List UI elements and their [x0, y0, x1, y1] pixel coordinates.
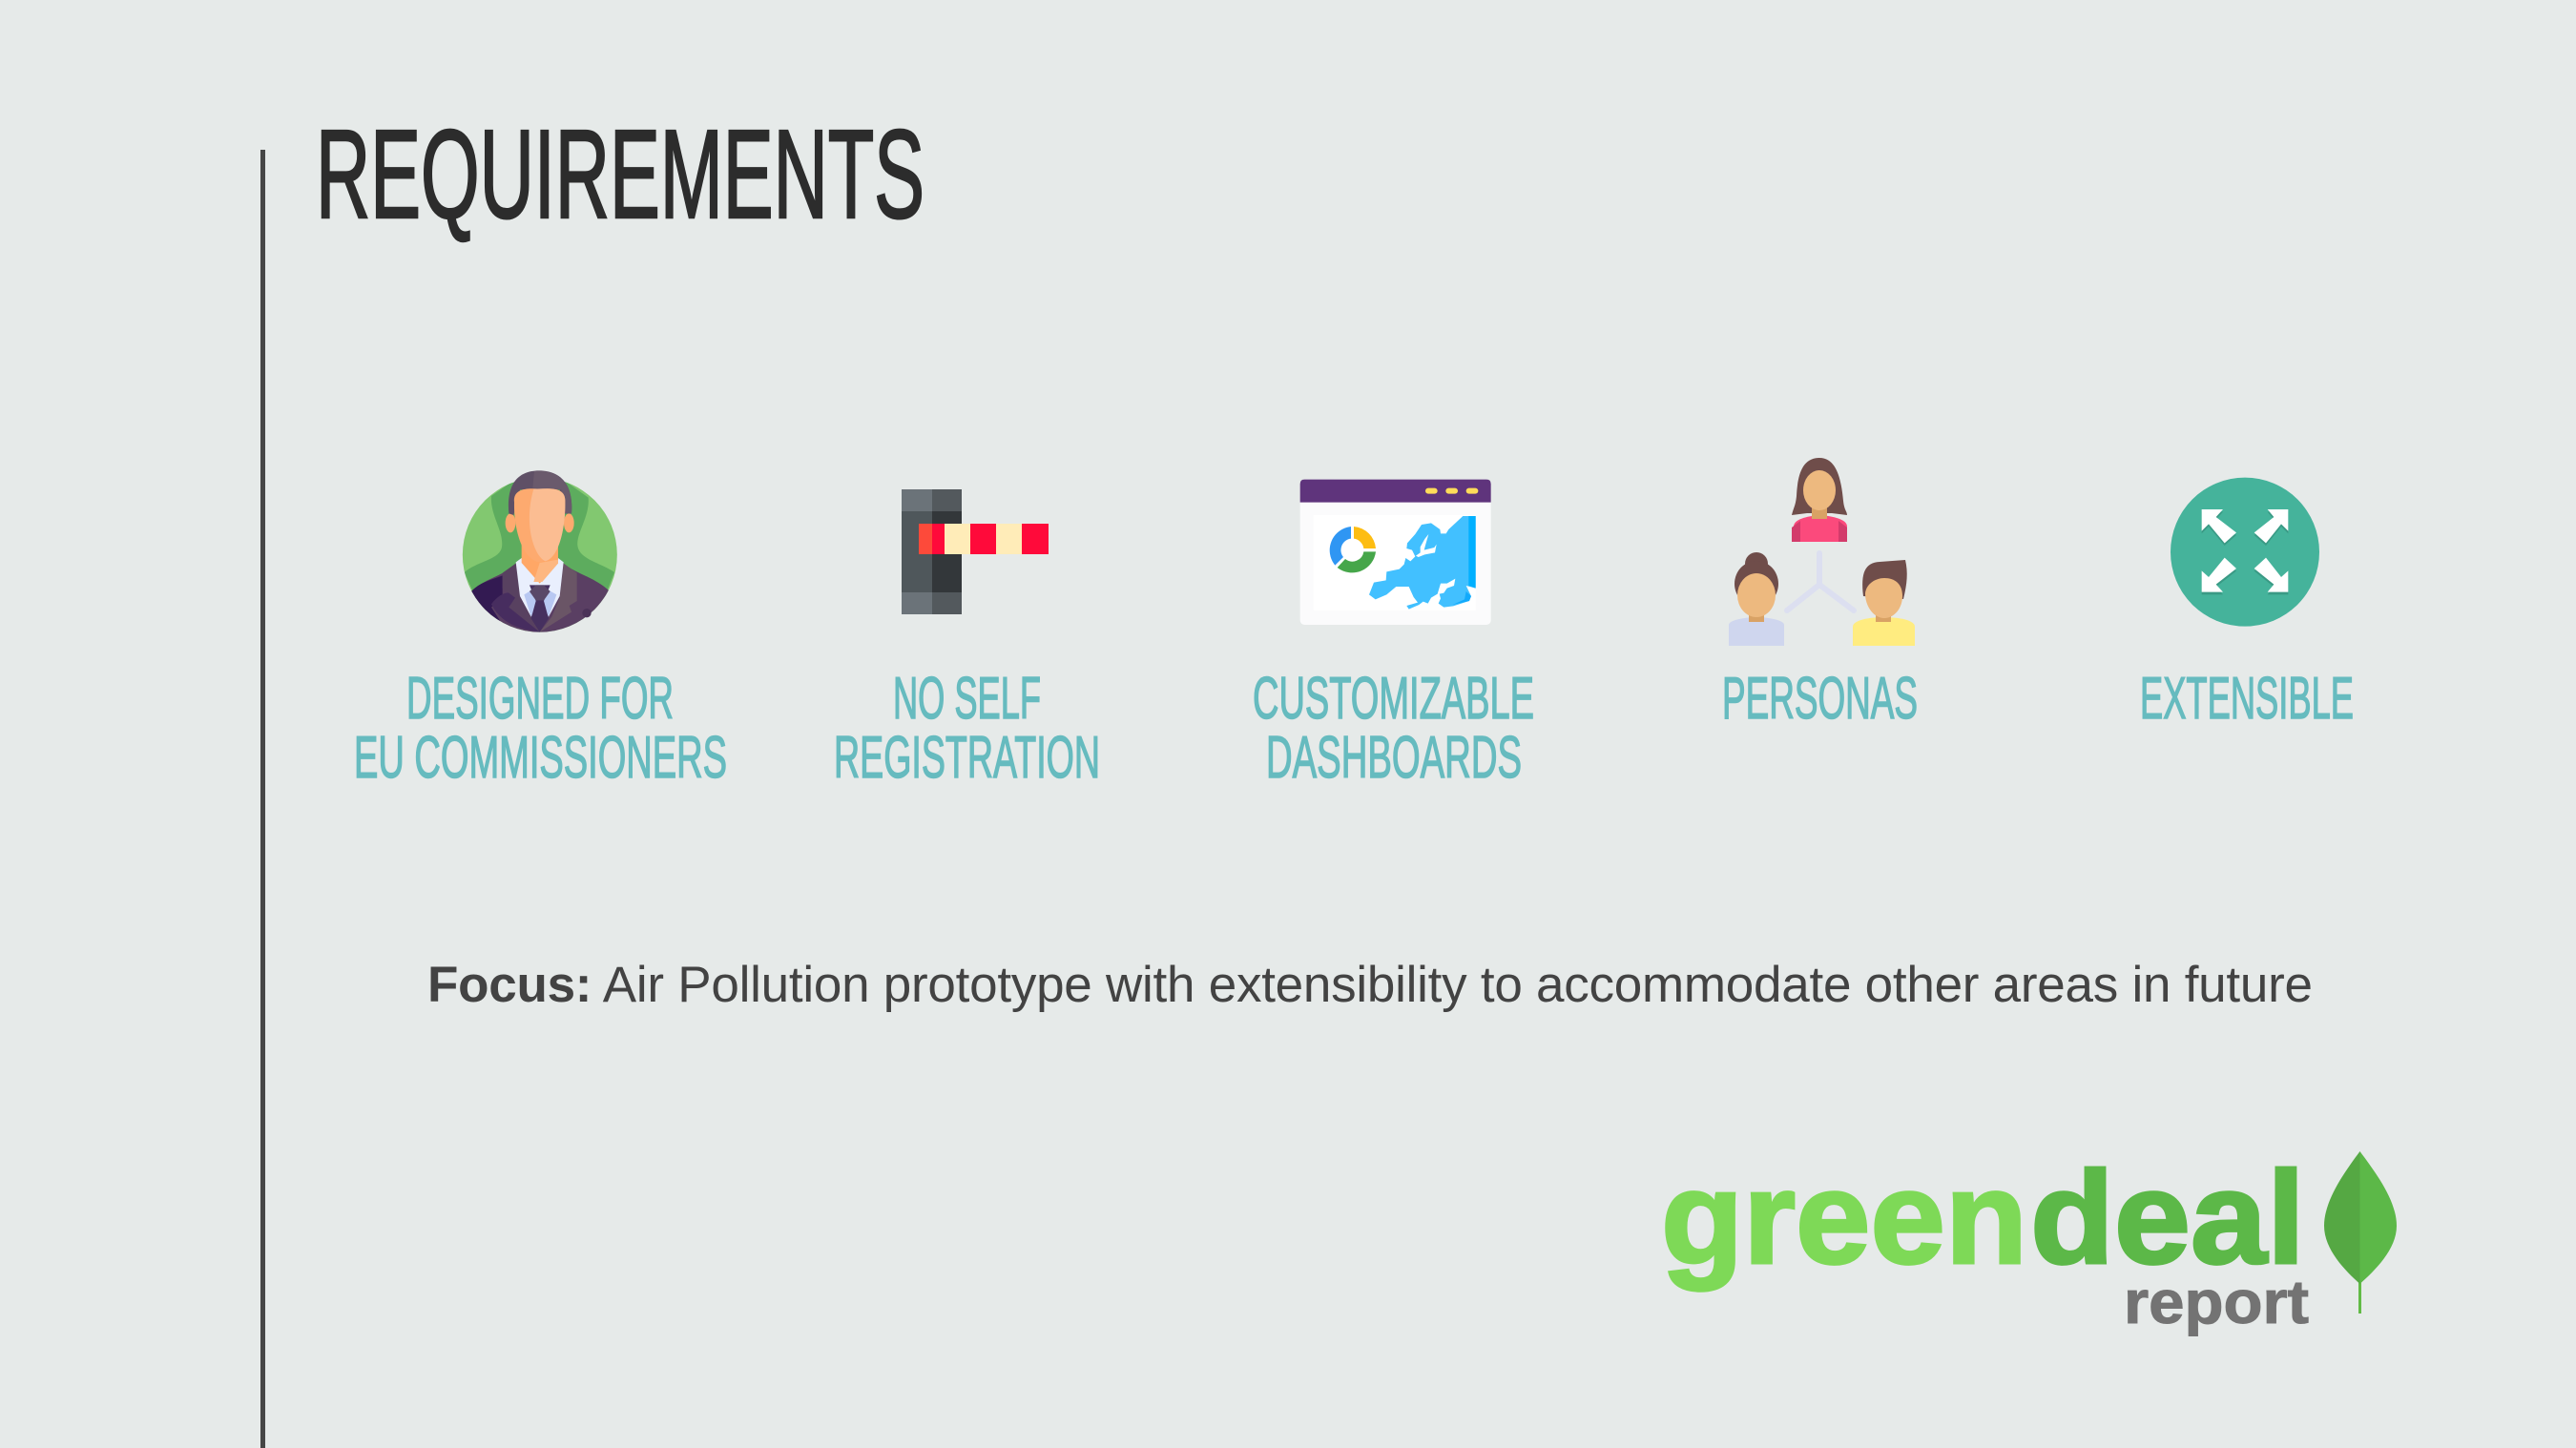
label: no self registration: NO SELF — [893, 666, 1041, 732]
logo word: report: report — [2124, 1268, 2309, 1336]
label: designed for EU commissioners — [354, 666, 727, 791]
label: no self registration: REGISTRATION — [834, 725, 1100, 791]
label: designed for EU commissioners: EU COMMISSIONERS — [354, 725, 727, 791]
label: customizable dashboards — [1253, 666, 1534, 791]
label: personas: PERSONAS — [1722, 666, 1918, 732]
icon: extensible arrows — [2171, 478, 2319, 627]
label: no self registration — [834, 666, 1100, 791]
logo word: deal: deal — [2030, 1145, 2305, 1292]
label: customizable dashboards: DASHBOARDS — [1266, 725, 1522, 791]
label: designed for EU commissioners: DESIGNED FOR — [406, 666, 674, 732]
logo word: green: green — [1661, 1145, 2027, 1292]
icon: dashboard window — [1300, 480, 1491, 625]
icon: personas — [1729, 458, 1915, 646]
label: customizable dashboards: CUSTOMIZABLE — [1253, 666, 1534, 732]
icon: leaf — [2324, 1151, 2397, 1314]
focus text: Focus: Air Pollution prototype with extensibility to accommodate other areas in future — [427, 957, 2313, 1013]
label: extensible: EXTENSIBLE — [2140, 666, 2354, 732]
icon: commissioner portrait — [463, 470, 617, 639]
icon: barrier — [902, 489, 1049, 614]
logo: greendeal report — [1661, 1145, 2397, 1336]
title: REQUIREMENTS — [316, 104, 924, 244]
